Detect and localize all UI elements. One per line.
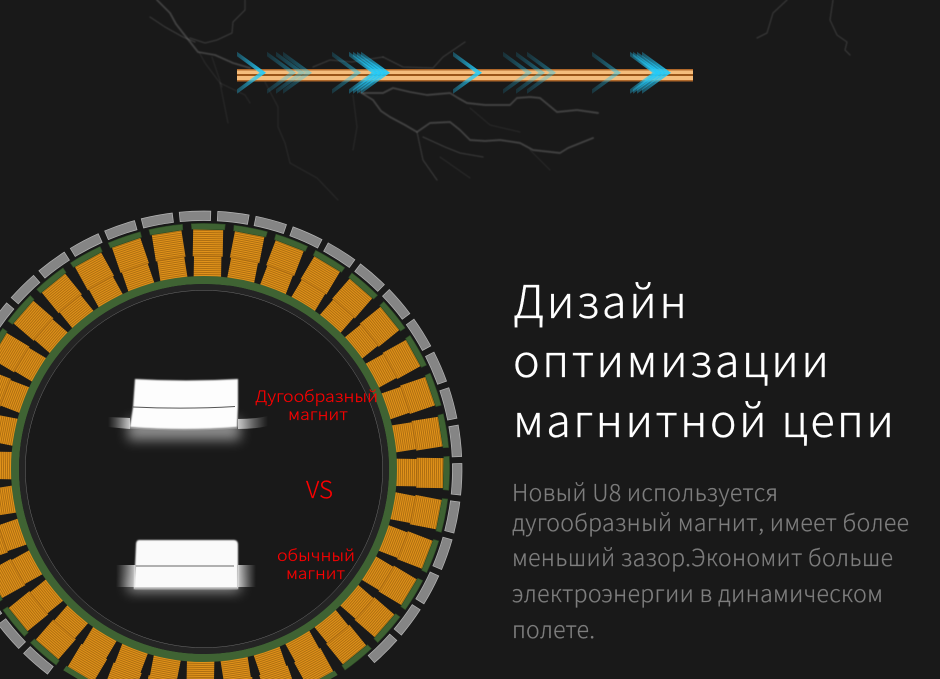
green stator ring bbox=[15, 280, 393, 658]
wires bbox=[116, 565, 135, 587]
inner dark band bbox=[22, 287, 386, 651]
current arrows bbox=[237, 52, 671, 94]
description text: Новый U8 используется bbox=[512, 474, 778, 508]
copper coil teeth bbox=[0, 219, 454, 679]
description text: электроэнергии в динамическом bbox=[512, 575, 883, 609]
label: ordinary magnet: магнит bbox=[286, 562, 345, 584]
grey outer magnet segments bbox=[0, 211, 462, 674]
description text: меньший зазор.Экономит больше bbox=[512, 539, 893, 573]
motor stator ring bbox=[0, 211, 462, 679]
label: arc magnet: Дугообразный bbox=[255, 385, 378, 407]
label: ordinary magnet bbox=[277, 544, 355, 584]
flat magnet sample bbox=[116, 540, 256, 592]
description text bbox=[512, 474, 909, 645]
glow bbox=[128, 578, 240, 592]
copper wire with current arrows bbox=[237, 52, 693, 94]
magnet body bbox=[134, 540, 238, 589]
wires bbox=[108, 417, 130, 429]
magnet seam bbox=[136, 565, 234, 567]
description text: дугообразный магнит, имеет более bbox=[512, 504, 909, 538]
title: магнитной цепи bbox=[513, 385, 894, 450]
thin inner line bbox=[25, 290, 383, 648]
title: Дизайн bbox=[513, 266, 687, 331]
label: ordinary magnet: обычный bbox=[277, 544, 355, 566]
label: arc magnet: магнит bbox=[288, 403, 348, 425]
title: оптимизации bbox=[513, 325, 829, 390]
title bbox=[513, 266, 894, 450]
label: VS: VS bbox=[306, 471, 333, 505]
magnet body bbox=[130, 379, 238, 429]
glow bbox=[128, 420, 240, 440]
arc magnet sample bbox=[108, 379, 268, 440]
label: arc magnet bbox=[255, 385, 378, 425]
copper wire bbox=[237, 69, 693, 82]
lightning bolts bbox=[150, 0, 850, 200]
magnet seam bbox=[133, 406, 235, 408]
description text: полете. bbox=[512, 611, 595, 645]
